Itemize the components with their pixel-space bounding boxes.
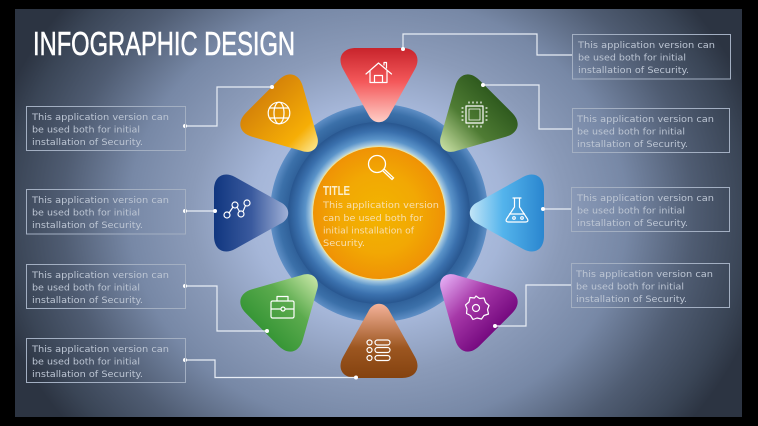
petal: green — [235, 250, 342, 357]
center body text — [322, 201, 439, 249]
text box: middle right: installation of Security. — [577, 219, 688, 229]
text box: lower right: be used both for initial — [576, 282, 684, 292]
petal: orange — [235, 69, 342, 176]
icon: magnifier — [368, 156, 394, 180]
text box: lower left: installation of Security. — [32, 296, 143, 306]
text box: middle right: be used both for initial — [577, 206, 685, 216]
outer ring — [270, 104, 488, 322]
title: INFOGRAPHIC DESIGN — [33, 25, 295, 62]
text box: middle left: installation of Security. — [32, 221, 143, 231]
center panel — [313, 147, 445, 279]
petal: dark green — [416, 69, 523, 176]
text box: middle right — [572, 188, 730, 232]
petal: brown — [341, 304, 417, 378]
text box: top right: This application version can — [577, 41, 715, 51]
text box: lower right: installation of Security. — [576, 295, 687, 305]
icon: list — [367, 340, 390, 360]
petal: light blue — [470, 175, 544, 251]
icon: gear — [466, 296, 489, 320]
text box: upper left — [26, 106, 186, 150]
icon: briefcase — [271, 296, 294, 318]
text box: middle left — [26, 190, 186, 234]
center body text: initial installation of — [323, 226, 415, 236]
petal: red — [341, 48, 417, 122]
center body text: Security. — [323, 239, 365, 249]
text box: bottom left: installation of Security. — [32, 370, 143, 380]
icon: globe — [268, 102, 290, 124]
text box: top right: be used both for initial — [578, 54, 686, 64]
text box: top right — [572, 34, 730, 79]
icon: network nodes — [224, 200, 250, 218]
text box: lower left: This application version can — [31, 271, 169, 281]
text box: bottom left: This application version can — [31, 345, 169, 355]
connector: upper left — [183, 85, 274, 128]
text box: upper right: This application version can — [576, 115, 714, 125]
text box: upper right: installation of Security. — [577, 140, 688, 150]
text box: top right: installation of Security. — [578, 66, 689, 76]
text box: middle right: This application version can — [576, 194, 714, 204]
center body text: can be used both for — [323, 214, 423, 224]
icon: chip — [462, 102, 487, 127]
text box: upper left: be used both for initial — [32, 126, 140, 136]
text box: middle left: be used both for initial — [32, 208, 140, 218]
text box: lower left — [26, 264, 186, 308]
petal: purple — [416, 250, 523, 357]
connector: lower left — [183, 284, 269, 333]
text box: middle left: This application version can — [31, 196, 169, 206]
center body text: This application version — [322, 201, 439, 211]
icon: house — [366, 62, 392, 82]
center orange circle — [313, 147, 445, 279]
connector: upper right — [481, 83, 572, 129]
text box: lower left: be used both for initial — [32, 284, 140, 294]
text box: lower right — [572, 264, 730, 308]
connector: lower right — [493, 285, 571, 328]
text box: upper left: This application version can — [31, 113, 169, 123]
connector: middle left — [183, 209, 217, 213]
text box: upper right — [572, 108, 730, 152]
text box: lower right: This application version can — [575, 270, 713, 280]
connector: bottom left — [183, 358, 358, 380]
text box: bottom left — [26, 338, 186, 382]
text box: upper right: be used both for initial — [577, 128, 685, 138]
petal: navy — [214, 175, 288, 251]
text box: bottom left: be used both for initial — [32, 358, 140, 368]
icon: flask — [506, 198, 528, 222]
center heading: TITLE — [323, 184, 350, 198]
middle ring — [288, 122, 470, 304]
connector: middle right — [541, 207, 571, 211]
connector: top right — [401, 34, 572, 55]
text box: upper left: installation of Security. — [32, 138, 143, 148]
